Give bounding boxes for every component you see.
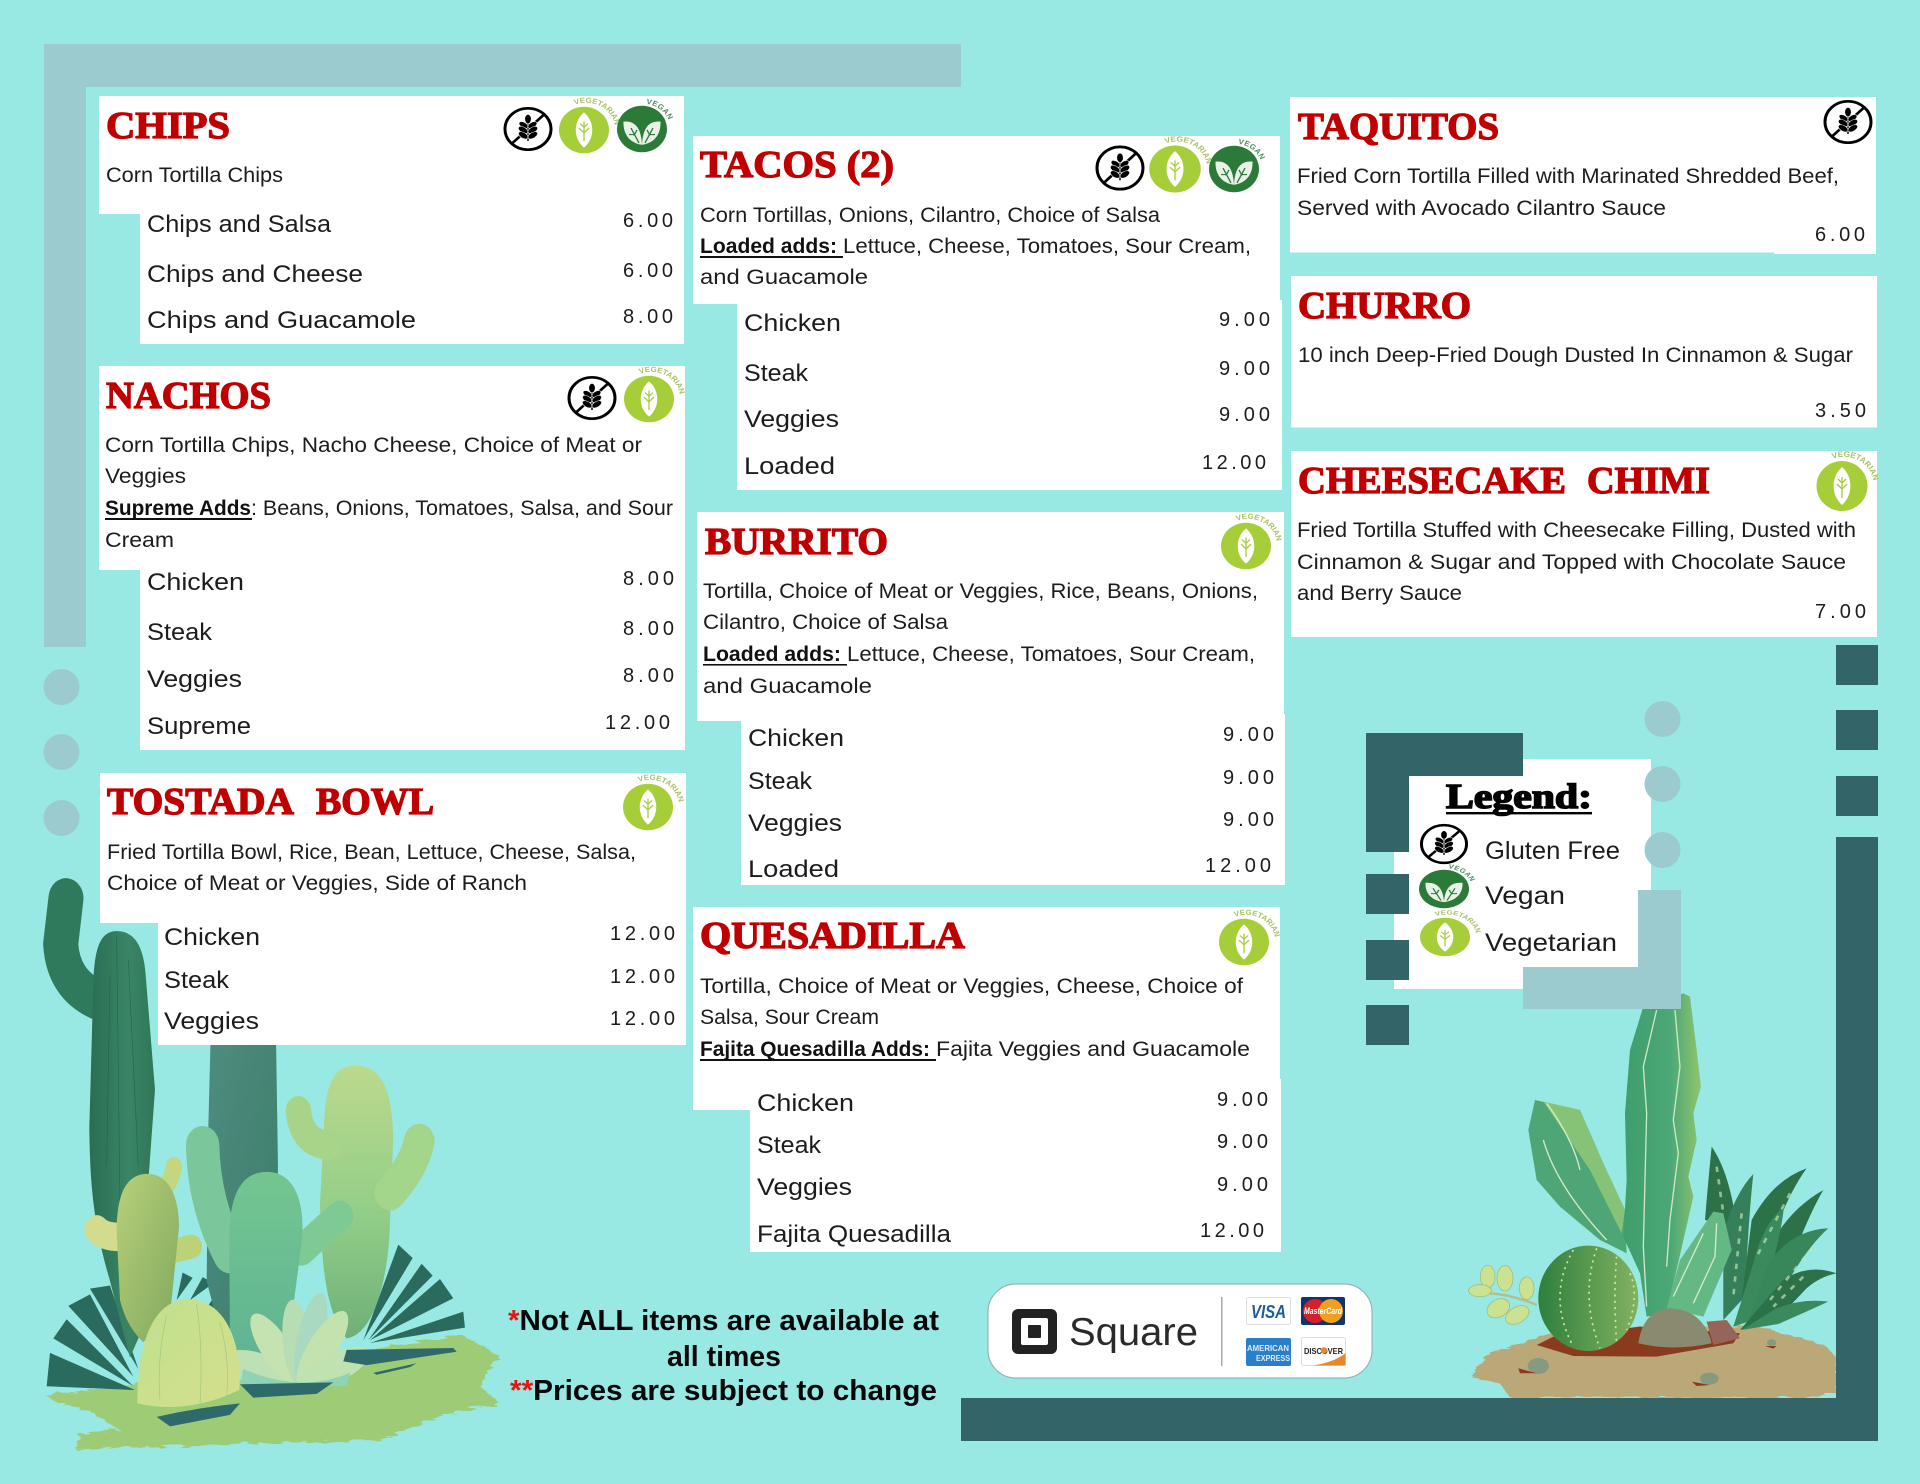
icon: vegetarian: VEGETARIAN <box>1233 910 1280 937</box>
item rows: 9.00 <box>1219 358 1270 380</box>
icon: gluten free <box>1825 101 1871 143</box>
description: Lettuce, Cheese, Tomatoes, Sour Cream, <box>843 235 1251 258</box>
item rows: Veggies <box>757 1174 852 1201</box>
description: Fajita Veggies and Guacamole <box>936 1038 1250 1061</box>
description: Veggies <box>105 465 186 488</box>
price: 7.00 <box>1815 601 1866 623</box>
description: Corn Tortilla Chips, Nacho Cheese, Choice of Meat or <box>105 434 642 457</box>
item rows: 9.00 <box>1219 404 1270 426</box>
item rows <box>147 568 674 740</box>
item rows: Chicken <box>757 1090 854 1117</box>
description: Corn Tortilla Chips <box>106 164 283 187</box>
item rows: 12.00 <box>610 966 675 988</box>
icon: vegetarian: VEGETARIAN <box>1235 514 1282 541</box>
card: discover <box>1302 1338 1346 1366</box>
heading: quesadilla: QUESADILLA <box>700 915 966 957</box>
description <box>700 975 1250 1061</box>
heading: nachos: NACHOS <box>106 375 271 417</box>
description: Cinnamon & Sugar and Topped with Chocolate Sauce <box>1297 551 1846 574</box>
panel: churro <box>1291 276 1877 428</box>
legend panel <box>1366 701 1681 1045</box>
icon: vegetarian: VEGETARIAN <box>637 774 684 802</box>
panel: quesadilla <box>693 907 1281 1252</box>
heading: burrito: BURRITO <box>705 521 888 563</box>
description: Corn Tortillas, Onions, Cilantro, Choice of Salsa <box>700 204 1160 227</box>
item rows: Veggies <box>164 1008 259 1035</box>
description: 10 inch Deep-Fried Dough Dusted In Cinnamon & Sugar <box>1298 344 1853 367</box>
panel: taquitos <box>1290 97 1876 254</box>
item rows: Chicken <box>744 310 841 337</box>
legend title: Legend: <box>1446 777 1592 816</box>
item rows: 8.00 <box>623 665 674 687</box>
panel: burrito <box>697 512 1285 885</box>
item rows: 12.00 <box>605 712 670 734</box>
item rows: 8.00 <box>623 618 674 640</box>
item rows: 9.00 <box>1219 309 1270 331</box>
icon: gluten free <box>505 108 551 150</box>
item rows: 9.00 <box>1223 767 1274 789</box>
description: Fried Tortilla Stuffed with Cheesecake Filling, Dusted with <box>1297 519 1856 542</box>
item rows: 9.00 <box>1223 809 1274 831</box>
item rows: 9.00 <box>1217 1174 1268 1196</box>
icon: vegetarian: VEGETARIAN <box>638 366 685 394</box>
icon: vegetarian <box>1219 910 1280 966</box>
card: visa <box>1246 1298 1290 1324</box>
heading: tostada bowl: TOSTADA <box>107 781 295 823</box>
description <box>700 204 1251 289</box>
description: Fajita Quesadilla Adds: <box>700 1038 930 1061</box>
icon: vegan <box>617 98 674 152</box>
decorative squares right <box>1836 645 1878 816</box>
payment badge: square <box>988 1284 1372 1378</box>
item rows: 12.00 <box>610 923 675 945</box>
description: Tortilla, Choice of Meat or Veggies, Rice, Beans, Onions, <box>703 580 1258 603</box>
description: Served with Avocado Cilantro Sauce <box>1297 197 1666 220</box>
heading: taquitos: TAQUITOS <box>1298 106 1499 148</box>
description: Salsa, Sour Cream <box>700 1006 879 1029</box>
price: 6.00 <box>1815 224 1865 246</box>
item rows: Veggies <box>744 406 839 433</box>
legend: gluten free <box>1421 825 1620 865</box>
item rows <box>744 309 1270 480</box>
icon: vegetarian <box>1221 514 1282 570</box>
legend: vegan: VEGAN <box>1449 864 1476 882</box>
item rows: Loaded <box>744 453 835 480</box>
legend: vegetarian: Vegetarian <box>1485 929 1617 957</box>
description <box>703 580 1258 698</box>
item rows: Veggies <box>147 666 242 693</box>
description: Fried Corn Tortilla Filled with Marinated Shredded Beef, <box>1297 165 1839 188</box>
description: and Guacamole <box>703 675 872 698</box>
icon: vegetarian <box>1816 451 1879 511</box>
item rows: Steak <box>748 768 813 795</box>
icon: vegetarian <box>623 774 684 830</box>
card: mastercard: MasterCard <box>1304 1306 1342 1316</box>
icon: square logo <box>1012 1309 1057 1354</box>
heading: chips: CHIPS <box>106 105 230 147</box>
legend: vegan <box>1419 864 1565 910</box>
description: and Guacamole <box>700 266 868 289</box>
icon: vegan: VEGAN <box>647 98 674 120</box>
item rows: Chips and Salsa <box>147 211 332 238</box>
item rows: Steak <box>147 619 213 646</box>
item rows: Chips and Cheese <box>147 261 363 288</box>
heading: cheesecake chimi: CHEESECAKE <box>1298 460 1566 502</box>
icon: vegetarian: VEGETARIAN <box>1831 451 1879 480</box>
item rows: Chicken <box>147 569 244 596</box>
item rows <box>748 724 1274 883</box>
card: visa: VISA <box>1251 1302 1286 1322</box>
card: american express: EXPRESS <box>1256 1353 1290 1363</box>
item rows: Steak <box>744 360 809 387</box>
illustration: cactus group left <box>45 898 500 1449</box>
item rows <box>757 1089 1268 1248</box>
icon: vegan: VEGAN <box>1239 138 1266 160</box>
item rows: Steak <box>757 1132 822 1159</box>
panel: cheesecake chimi <box>1291 451 1879 637</box>
item rows: 6.00 <box>623 210 673 232</box>
item rows: 12.00 <box>1205 855 1271 877</box>
card: discover: DISCOVER <box>1304 1346 1343 1356</box>
item rows: 12.00 <box>1200 1220 1264 1242</box>
price: 3.50 <box>1815 400 1866 422</box>
description <box>1297 165 1839 220</box>
item rows: Chips and Guacamole <box>147 307 416 334</box>
description: Loaded adds: <box>700 235 837 258</box>
frame: bottom-right corner bracket <box>961 837 1878 1441</box>
footnote: *Not ALL items are available at <box>508 1305 939 1337</box>
legend: vegetarian <box>1420 910 1617 957</box>
heading: tacos: TACOS (2) <box>700 144 894 186</box>
footnote: **Prices are subject to change <box>510 1375 937 1407</box>
description: Fried Tortilla Bowl, Rice, Bean, Lettuce, Cheese, Salsa, <box>107 841 636 864</box>
icon: vegan <box>1209 138 1266 192</box>
item rows: 9.00 <box>1217 1089 1268 1111</box>
heading: cheesecake chimi <box>1298 460 1710 502</box>
legend: gluten free: Gluten Free <box>1485 837 1620 865</box>
item rows: Steak <box>164 967 230 994</box>
item rows: Loaded <box>748 856 839 883</box>
item rows: 8.00 <box>623 306 673 328</box>
icon: vegetarian <box>559 98 619 154</box>
card: mastercard <box>1301 1297 1345 1325</box>
item rows: Chicken <box>164 924 260 951</box>
square wordmark: Square <box>1069 1311 1198 1354</box>
item rows: 12.00 <box>610 1008 675 1030</box>
card: american express: AMERICAN <box>1247 1343 1289 1353</box>
card: american express <box>1246 1338 1291 1366</box>
illustration: cactus group right <box>1469 993 1837 1398</box>
panel: tacos <box>693 136 1282 490</box>
heading: churro: CHURRO <box>1298 285 1471 327</box>
panel: tostada bowl <box>100 773 686 1045</box>
item rows <box>147 210 673 334</box>
icon: vegetarian: VEGETARIAN <box>1164 136 1212 164</box>
decorative circles left <box>44 669 80 836</box>
description <box>107 841 636 895</box>
legend: vegan: Vegan <box>1485 882 1565 910</box>
item rows: 9.00 <box>1223 724 1274 746</box>
item rows <box>164 923 675 1035</box>
description: and Berry Sauce <box>1297 582 1462 605</box>
description <box>1297 519 1856 605</box>
item rows: 12.00 <box>1202 452 1266 474</box>
heading: cheesecake chimi: CHIMI <box>1587 460 1710 502</box>
heading: tostada bowl <box>107 781 434 823</box>
frame: top-left corner bracket <box>44 44 961 647</box>
icon: gluten free <box>1097 147 1143 189</box>
item rows: 6.00 <box>623 260 673 282</box>
description: Cream <box>105 529 174 552</box>
item rows: Chicken <box>748 725 844 752</box>
description: Supreme Adds <box>105 497 251 520</box>
item rows: 9.00 <box>1217 1131 1268 1153</box>
description: Loaded adds: <box>703 643 841 666</box>
description: Lettuce, Cheese, Tomatoes, Sour Cream, <box>847 643 1255 666</box>
panel: nachos <box>99 366 685 750</box>
legend: vegetarian: VEGETARIAN <box>1434 910 1481 933</box>
footnote: all times <box>667 1341 781 1373</box>
description: Tortilla, Choice of Meat or Veggies, Cheese, Choice of <box>700 975 1243 998</box>
panel: chips <box>99 96 684 344</box>
icon: gluten free <box>569 377 615 419</box>
description <box>105 434 673 552</box>
description: Cilantro, Choice of Salsa <box>703 611 948 634</box>
item rows: 8.00 <box>623 568 674 590</box>
description: Choice of Meat or Veggies, Side of Ranch <box>107 872 527 895</box>
footnote <box>508 1305 939 1407</box>
item rows: Veggies <box>748 810 842 837</box>
description: : Beans, Onions, Tomatoes, Salsa, and Sour <box>251 497 673 520</box>
icon: vegetarian <box>624 366 685 422</box>
icon: vegetarian <box>1149 136 1212 192</box>
item rows: Supreme <box>147 713 251 740</box>
item rows: Fajita Quesadilla <box>757 1221 952 1248</box>
heading: tostada bowl: BOWL <box>316 781 434 823</box>
icon: vegetarian: VEGETARIAN <box>573 98 619 125</box>
